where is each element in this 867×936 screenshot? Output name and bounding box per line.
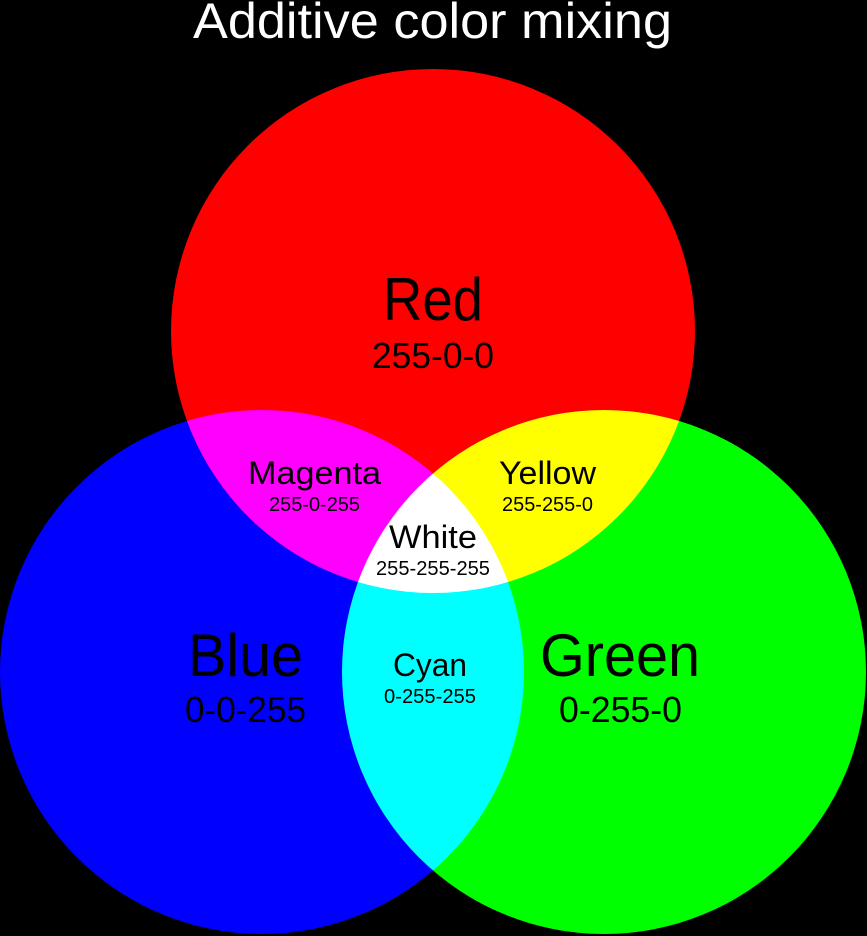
circle: red	[171, 69, 695, 593]
label: magenta	[248, 455, 381, 516]
circle: blue	[0, 410, 524, 934]
label: blue: Blue	[188, 622, 303, 689]
label: magenta: Magenta	[248, 455, 381, 491]
label: red	[372, 266, 494, 376]
label: white: White	[389, 519, 477, 555]
label: green: Green	[540, 622, 700, 689]
label: blue	[185, 622, 306, 730]
label: cyan	[384, 647, 476, 708]
label: cyan: Cyan	[393, 647, 467, 683]
label: blue: 0-0-255	[185, 689, 306, 730]
circle: green	[342, 410, 866, 934]
label: yellow: Yellow	[499, 455, 597, 491]
label: magenta: 255-0-255	[269, 494, 360, 516]
label: yellow: 255-255-0	[502, 494, 593, 516]
label: red: Red	[383, 266, 483, 333]
label: white	[376, 519, 490, 580]
label: cyan: 0-255-255	[384, 686, 476, 708]
label: green: 0-255-0	[559, 689, 682, 730]
label: white: 255-255-255	[376, 558, 490, 580]
label: yellow	[499, 455, 597, 516]
label: red: 255-0-0	[372, 335, 494, 376]
label: green	[540, 622, 700, 730]
